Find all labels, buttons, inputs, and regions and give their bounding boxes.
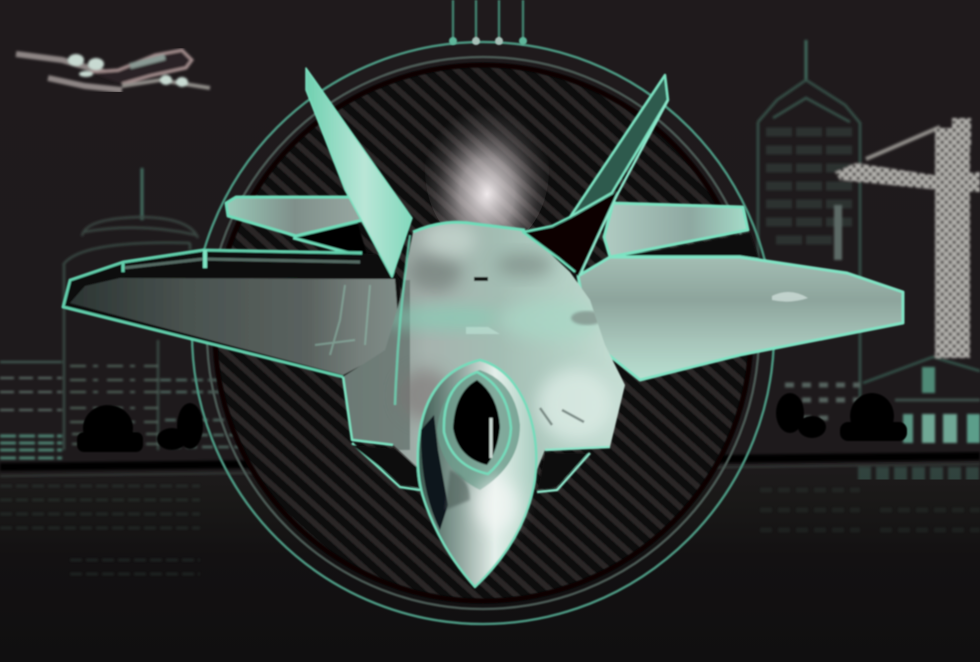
right vertical tail	[523, 75, 668, 276]
left stabilizer	[226, 197, 368, 258]
right wing	[578, 257, 903, 380]
glow behind jet	[425, 90, 549, 250]
building: round tower	[63, 168, 198, 450]
cockpit canopy	[444, 372, 511, 474]
top connectors	[449, 0, 527, 45]
fuselage	[340, 222, 625, 492]
right stabilizer	[604, 203, 760, 262]
airplane top left	[16, 50, 210, 90]
building: hall with columns	[863, 357, 980, 443]
building: low block	[0, 362, 62, 458]
building: right of round tower	[160, 380, 240, 447]
left trees	[77, 403, 203, 452]
ground line and street	[0, 452, 980, 478]
target disc with stripes	[192, 42, 774, 624]
outer rings	[192, 42, 774, 624]
building: tower	[758, 40, 860, 418]
right trees	[776, 393, 907, 441]
left wing	[63, 250, 400, 377]
left vertical tail	[306, 68, 412, 277]
crane	[835, 118, 980, 358]
nose section	[418, 360, 536, 587]
left city buildings	[0, 168, 240, 458]
fighter jet	[63, 68, 903, 587]
water reflection	[0, 486, 980, 574]
right city buildings	[758, 40, 980, 443]
